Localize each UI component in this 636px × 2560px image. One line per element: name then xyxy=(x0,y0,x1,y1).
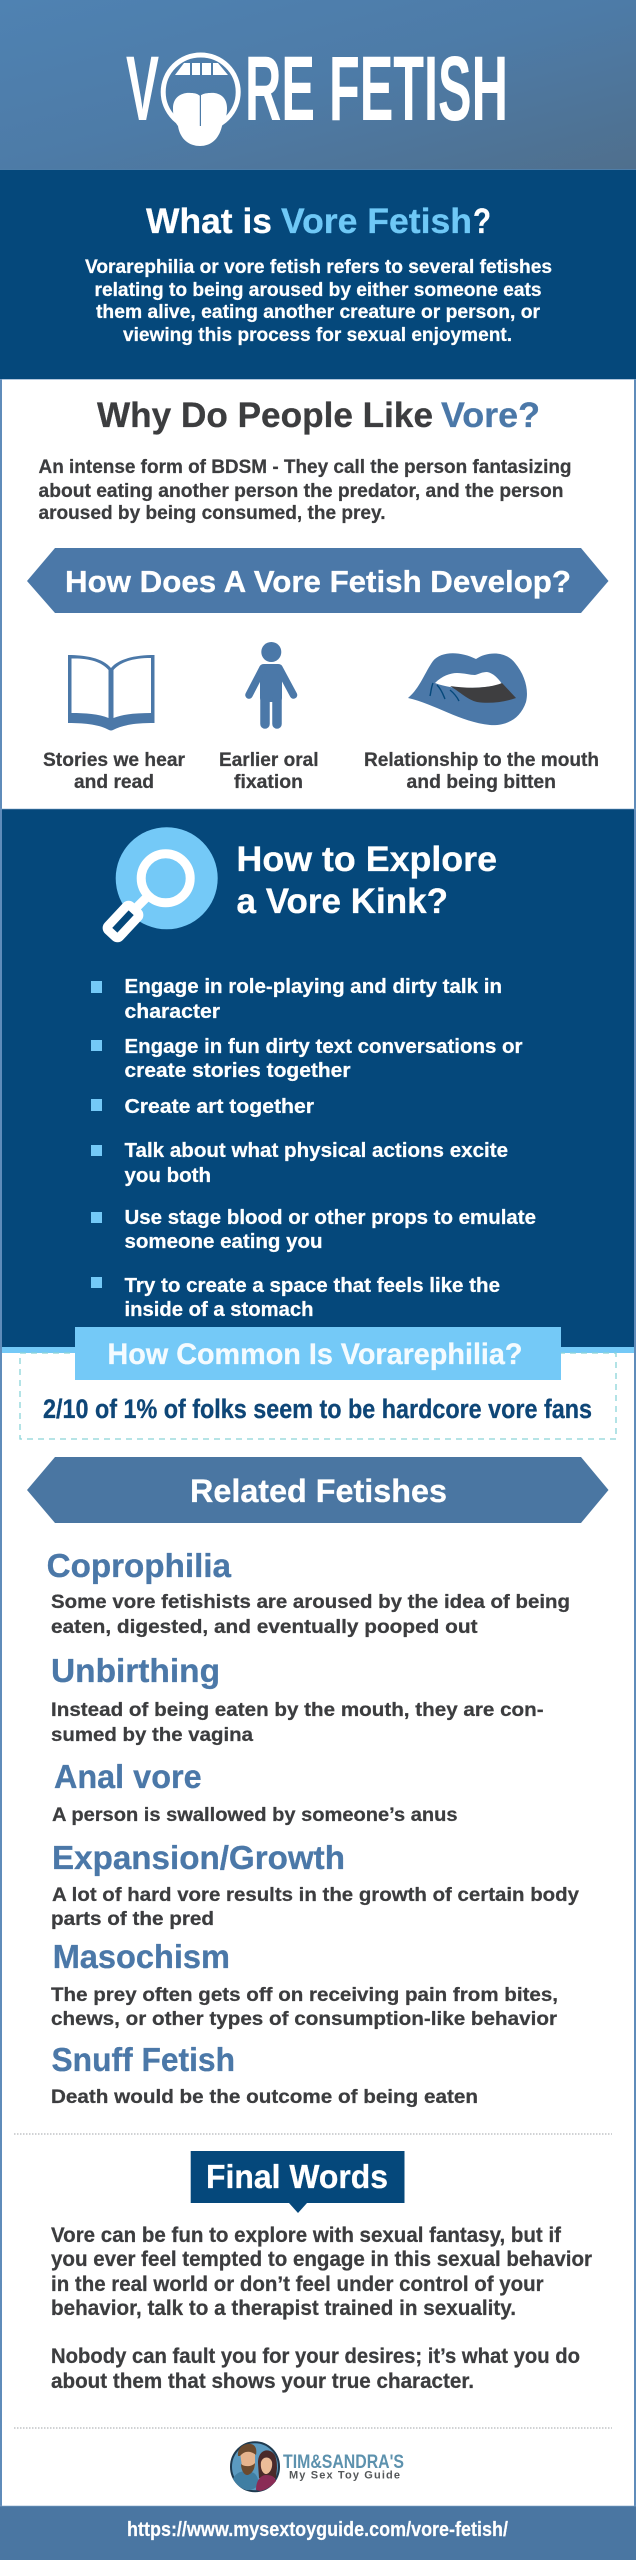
text: final words body: Nobody can fault you for your desires; it’s what you do xyxy=(51,2345,580,2368)
text: final words body xyxy=(51,2224,592,2393)
caption: earlier oral fixation xyxy=(219,749,318,793)
footer: url: https://www.mysextoyguide.com/vore-fetish/ xyxy=(127,2519,508,2541)
bullet: physical actions: you both xyxy=(124,1165,211,1187)
text: intense form of BDSM xyxy=(38,456,572,524)
banner: related fetishes: Related Fetishes xyxy=(190,1473,447,1509)
text: definition: viewing this process for sexual enjoyment. xyxy=(123,324,512,346)
icon: child figure xyxy=(249,642,294,724)
panel: how common is vorarephilia xyxy=(0,1327,636,1439)
heading: What is Vore Fetish?: Vore Fetish xyxy=(281,202,472,241)
bullet: stage blood xyxy=(91,1207,536,1253)
entry: coprophilia: Coprophilia xyxy=(47,1547,232,1584)
bullet: role-playing: Engage in role-playing and dirty talk in xyxy=(124,976,502,998)
heading: What is Vore Fetish?: What is xyxy=(146,202,272,241)
bullet: text conversations: Engage in fun dirty text conversations or xyxy=(124,1036,523,1058)
entry: expansion/growth: parts of the pred xyxy=(51,1908,214,1930)
bullet: text conversations: create stories together xyxy=(124,1060,351,1082)
panel: header banner xyxy=(0,0,636,169)
entry: masochism: The prey often gets off on receiving pain from bites, xyxy=(51,1984,558,2006)
entry: masochism xyxy=(51,1938,558,2030)
heading: how to explore a vore kink xyxy=(236,840,497,921)
bullet: role-playing: character xyxy=(124,1001,220,1023)
caption: stories we hear and read: and read xyxy=(74,771,154,793)
text: definition: relating to being aroused by either someone eats xyxy=(94,279,542,301)
text: intense form of BDSM: aroused by being consumed, the prey. xyxy=(38,502,386,524)
caption: earlier oral fixation: Earlier oral xyxy=(219,749,318,771)
caption: relationship to the mouth: Relationship to the mouth xyxy=(364,749,599,771)
footer: url xyxy=(0,2506,636,2560)
caption: relationship to the mouth xyxy=(364,749,599,793)
text: final words body: in the real world or don’t feel under control of your xyxy=(51,2273,544,2296)
bullet: stomach space: Try to create a space that feels like the xyxy=(124,1275,500,1297)
heading: What is Vore Fetish? xyxy=(146,202,491,241)
entry: masochism: chews, or other types of consumption-like behavior xyxy=(51,2008,557,2030)
text: final words body: Vore can be fun to explore with sexual fantasy, but if xyxy=(51,2224,562,2247)
text: definition: them alive, eating another creature or person, or xyxy=(96,301,540,323)
logo: Tim and Sandra's: My Sex Toy Guide xyxy=(289,2470,400,2482)
bullet: stomach space xyxy=(91,1275,500,1321)
entry: snuff fetish: Death would be the outcome of being eaten xyxy=(51,2086,478,2108)
heading: Why Do People Like Vore?: Vore? xyxy=(441,396,540,435)
bullet: stage blood: someone eating you xyxy=(124,1231,322,1253)
text: final words body: behavior, talk to a therapist trained in sexuality. xyxy=(51,2297,516,2320)
text: definition xyxy=(85,256,552,346)
panel: what is vore fetish xyxy=(0,169,636,379)
icon: magnifying glass xyxy=(106,827,218,939)
callout: final words heading: Final Words xyxy=(206,2158,388,2195)
panel: final words xyxy=(51,2151,592,2393)
panel: why and how it develops xyxy=(0,379,636,809)
text: intense form of BDSM: about eating another person the predator, and the person xyxy=(38,480,564,502)
entry: coprophilia xyxy=(47,1547,570,1638)
logo: Tim and Sandra's xyxy=(231,2442,404,2491)
entry: unbirthing: Instead of being eaten by the mouth, they are con- xyxy=(51,1699,544,1721)
bullet: role-playing xyxy=(91,976,502,1023)
bullet: art: Create art together xyxy=(124,1096,314,1118)
text: final words body: you ever feel tempted to engage in this sexual behavior xyxy=(51,2248,592,2271)
entry: expansion/growth: A lot of hard vore results in the growth of certain body xyxy=(52,1884,579,1906)
list: ways to explore xyxy=(91,976,536,1321)
entry: anal vore: A person is swallowed by someone’s anus xyxy=(52,1804,458,1826)
bullet: physical actions: Talk about what physical actions excite xyxy=(124,1140,508,1162)
caption: relationship to the mouth: and being bitten xyxy=(406,771,556,793)
banner: how does a vore fetish develop: How Does A Vore Fetish Develop? xyxy=(65,565,571,599)
entry: expansion/growth xyxy=(51,1839,579,1930)
entry: unbirthing xyxy=(51,1652,544,1746)
entry: anal vore xyxy=(52,1758,458,1826)
bullet: text conversations xyxy=(91,1036,523,1082)
entry: masochism: Masochism xyxy=(53,1938,230,1975)
heading: how common: How Common Is Vorarephilia? xyxy=(108,1338,522,1371)
heading: how to explore a vore kink: How to Explore xyxy=(236,840,497,879)
bullet: stage blood: Use stage blood or other props to emulate xyxy=(124,1207,536,1229)
caption: earlier oral fixation: fixation xyxy=(234,771,303,793)
banner: related fetishes xyxy=(27,1457,608,1523)
callout: final words heading xyxy=(191,2151,404,2213)
heading: Why Do People Like Vore?: Why Do People Like xyxy=(97,396,433,435)
title: Vore Fetish xyxy=(126,38,508,146)
panel: related fetishes xyxy=(27,1457,608,2108)
entry: expansion/growth: Expansion/Growth xyxy=(52,1839,345,1876)
entry: unbirthing: sumed by the vagina xyxy=(51,1724,253,1746)
bullet: physical actions xyxy=(91,1140,508,1187)
icon: open mouth with tongue xyxy=(163,55,238,146)
heading: What is Vore Fetish?: ? xyxy=(473,202,491,241)
entry: unbirthing: Unbirthing xyxy=(51,1652,220,1689)
text: final words body: about them that shows your true character. xyxy=(51,2370,474,2393)
entry: snuff fetish: Snuff Fetish xyxy=(52,2041,235,2078)
entry: coprophilia: eaten, digested, and eventually pooped out xyxy=(51,1616,478,1638)
heading: how to explore a vore kink: a Vore Kink? xyxy=(236,882,448,921)
panel: how to explore a vore kink xyxy=(0,809,636,1347)
text: intense form of BDSM: An intense form of BDSM - They call the person fantasizing xyxy=(38,456,572,478)
banner: how does a vore fetish develop xyxy=(27,548,608,613)
logo: Tim and Sandra's: TIM&SANDRA'S xyxy=(283,2452,404,2473)
caption: stories we hear and read xyxy=(43,749,185,793)
title: Vore Fetish: V xyxy=(126,38,159,140)
icon: couple portrait xyxy=(231,2442,279,2491)
text: definition: Vorarephilia or vore fetish refers to several fetishes xyxy=(85,256,552,278)
caption: stories we hear and read: Stories we hear xyxy=(43,749,185,771)
entry: snuff fetish xyxy=(51,2041,478,2108)
bullet: stomach space: inside of a stomach xyxy=(124,1299,314,1321)
icon: open book xyxy=(68,655,154,730)
entry: anal vore: Anal vore xyxy=(54,1758,202,1795)
entry: coprophilia: Some vore fetishists are aroused by the idea of being xyxy=(51,1591,570,1613)
icon: lips biting xyxy=(408,653,527,725)
